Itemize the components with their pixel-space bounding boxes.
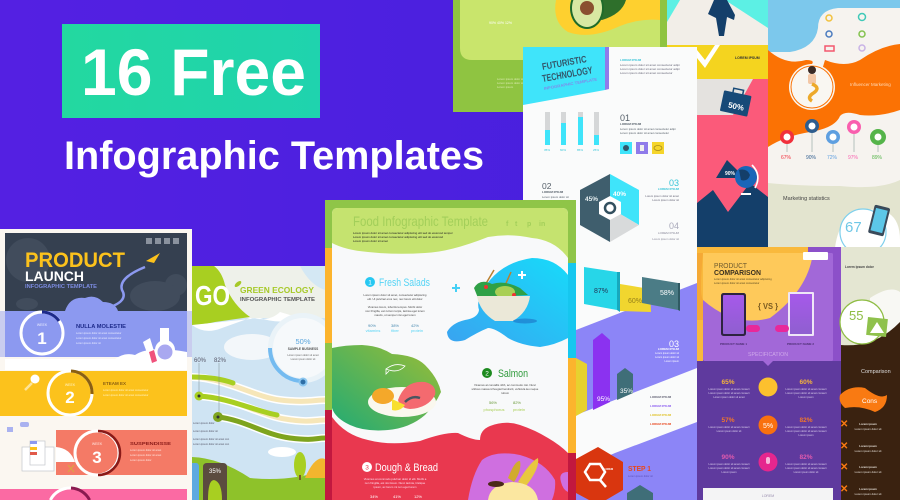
icon: phone: [868, 205, 890, 237]
text: comparison descriptions: Lorem ipsum dolor sit amet consect: [786, 391, 827, 395]
legend: column labels: LOREM IPSUM: [650, 395, 672, 399]
section: salmon: [472, 368, 539, 412]
section: salmon: 82%: [513, 400, 521, 405]
legend: column labels: LOREM IPSUM: [650, 413, 672, 417]
chart: hexagon: 40%: [613, 191, 626, 198]
icon: briefcase 50%: [720, 86, 752, 117]
section: fresh salads: non fringilla, est rutrum turpis, lacinia eget lorem: [365, 309, 425, 313]
text: section 02: 02: [542, 181, 552, 191]
panel: product comparison: [697, 247, 841, 500]
icons: social: t: [515, 221, 518, 228]
icons: x marks and rows: Lorem ipsum: [859, 422, 877, 426]
chart: 35% label: [203, 463, 227, 500]
text: band description: Lorem ipsum dolor sit amet con: [193, 442, 230, 446]
text: comparison descriptions: Lorem ipsum: [722, 470, 736, 474]
chart: comparison values: 82%: [799, 417, 813, 424]
icon: plus mark blue: [452, 284, 460, 292]
title badge: 16 Free: [81, 35, 306, 109]
panel: business template: [667, 0, 768, 248]
chart: isometric boxes: 58%: [660, 290, 674, 297]
section: salmon: rutrum: [501, 391, 510, 395]
icons: social squares: [146, 238, 179, 244]
text: section 03 on purple: Lorem ipsum dolor sit: [655, 352, 679, 355]
text: percent labels: [194, 358, 227, 364]
icon: briefcase 50%: 50%: [727, 101, 745, 113]
section: dough and bread: Dough & Bread: [375, 462, 438, 474]
chart: blue label: [192, 463, 199, 500]
text: section 01: Lorem ipsum dolor sit amet consectetur: [620, 131, 669, 135]
heading: launch: LAUNCH: [25, 268, 84, 284]
text: vs: { VS }: [758, 302, 778, 311]
text: intro: Lorem ipsum dolor sit amet consectetur adipiscing elit sed do eiusmod: [353, 235, 443, 239]
text: comparison descriptions: Lorem ipsum dolor sit amet consect: [786, 466, 827, 470]
text: intro: Lorem ipsum dolor sit amet: [353, 239, 388, 243]
markers: band dots: [194, 363, 223, 422]
chart: hexagon: [580, 174, 639, 242]
band: week 3: [56, 430, 187, 475]
text: avocado caption: Lorem ipsum: [497, 85, 514, 89]
icon: tree: [294, 452, 306, 480]
icon: documents illustration: [7, 422, 74, 472]
band: week 2: Lorem ipsum dolor sit amet consectetur: [103, 393, 149, 397]
text: product names: PRODUCT NAME 1: [720, 342, 747, 346]
icon: paper plane: [146, 253, 160, 263]
chart: 55% ring: [840, 300, 884, 344]
icon: flasks: [143, 328, 175, 364]
chart: 55% ring: 55: [849, 308, 863, 323]
icon: triangle 90%: [716, 160, 745, 178]
text: intro paragraph: Lorem ipsum dolor sit amet consectetur: [620, 71, 673, 75]
section: fresh salads: [364, 277, 430, 333]
band: week 2: WEEK: [65, 383, 76, 387]
section: fresh salads: Vivamus lorem, lobortis tempus. Morbi dolor: [368, 305, 422, 309]
section: dough and bread: [362, 462, 438, 499]
cloud: [65, 297, 118, 311]
band: week 3: Lorem ipsum dolor sit amet: [130, 448, 162, 452]
icon: bread: [488, 458, 538, 500]
icon: cons blob: Cons: [862, 398, 878, 405]
badge: mic: [758, 452, 778, 472]
section: salmon: Vivamus at convallis nibh, ac commodo nisi. Nunc: [474, 383, 537, 387]
blob: blue: [447, 258, 568, 347]
icon: cons blob: [840, 387, 887, 412]
text: step caption: Lorem ipsum dolor sit: [628, 474, 653, 478]
icons: x marks and rows: [840, 419, 882, 496]
chart: isometric boxes: 60%: [628, 298, 642, 305]
chart: comparison values: 82%: [799, 454, 813, 461]
chart: arrow columns: 95%: [597, 396, 610, 403]
band: week 4: [0, 488, 187, 500]
icon: leaf: [234, 280, 242, 288]
chart: isometric boxes: [584, 267, 680, 312]
section: salmon: ultrices massa id feugiat hendrerit, vehicula leo neque: [472, 387, 539, 391]
text: comparison descriptions: Lorem ipsum: [798, 433, 814, 437]
band: week 3: 3: [92, 448, 102, 467]
icons: x marks and rows: Lorem ipsum: [859, 487, 877, 491]
text: percent labels: 82%: [214, 358, 227, 364]
text: section 03: Lorem ipsum dolor sit amet: [645, 194, 679, 198]
text: comparison descriptions: Lorem ipsum dolor sit amet consect: [786, 429, 827, 433]
chart: comparison values: 57%: [721, 417, 735, 424]
section: dough and bread: 34%: [370, 494, 378, 499]
icons: x marks and rows: ✕: [840, 484, 848, 495]
heading: food infographic template: Food Infographic Template: [353, 213, 488, 229]
text: comparison descriptions: Lorem ipsum dolor sit amet consect: [786, 425, 827, 429]
panel: food infographic: [325, 200, 576, 500]
text: section 03: 03: [669, 178, 679, 188]
heading: futuristic technology: TECHNOLOGY: [541, 65, 594, 85]
heading: product comparison: Lorem ipsum dolor sit amet consectetur adipiscing: [714, 277, 772, 281]
text: avocado caption: [497, 77, 531, 89]
ground: [192, 457, 325, 500]
text: section 03 on purple: 03: [669, 339, 679, 349]
icon: picture tile: [866, 317, 888, 337]
chart: wavy bands: [192, 377, 325, 439]
text: comparison descriptions: Lorem ipsum dolor sit amet consect: [786, 462, 827, 466]
band: week 3: SUSPENDISSE: [130, 441, 171, 446]
section: fresh salads: Fresh Salads: [379, 277, 430, 289]
pill buttons: [746, 325, 789, 332]
icons: x marks and rows: ✕: [840, 462, 848, 473]
section: fresh salads: 1: [368, 280, 372, 286]
band: week 2: Lorem ipsum dolor sit amet consectetur: [103, 388, 149, 392]
chart: comparison values: [721, 379, 813, 461]
icon: plus marks: [518, 271, 526, 279]
text: intro: [353, 231, 453, 243]
text: infographic template: INFOGRAPHIC TEMPLATE: [240, 297, 315, 303]
icon: salmon plate: [368, 382, 436, 417]
chart: vertical bars: [544, 112, 599, 152]
section: fresh salads: 90%: [368, 323, 376, 328]
icons: x marks and rows: Lorem ipsum dolor sit: [855, 449, 882, 453]
text: intro: Lorem ipsum dolor sit amet consectetur adipiscing elit sed do eiusmod tempor: [353, 231, 453, 235]
icon: salad bowl: [474, 270, 537, 324]
icons: x marks and rows: Lorem ipsum: [859, 444, 877, 448]
pointer notch: [763, 361, 773, 366]
chart: circular gauge 50%: SAMPLE BUSINESS: [288, 347, 318, 351]
icon: red magnifier hexagon: LOREM: [604, 468, 613, 471]
text: section 04: Lorem ipsum dolor sit: [652, 237, 679, 241]
text: section 02: LOREM IPSUM: [542, 190, 564, 194]
text: avocado caption: Lorem ipsum dolor sit amet: [497, 77, 531, 81]
blob: red: [332, 417, 568, 500]
section: dough and bread: non fringilla, est nisi lorem. Nunc lacinia, tristique: [365, 481, 426, 485]
text: comparison descriptions: Lorem ipsum dolor sit amet consect: [709, 391, 750, 395]
icon: businessman: [708, 0, 735, 36]
chart: comparison values: 65%: [721, 379, 735, 386]
band: week 2: 2: [65, 388, 75, 407]
text: section 03 on purple: [655, 339, 679, 363]
icon: teal hexagon partial: [627, 485, 653, 500]
text: section 02: Lorem ipsum dolor sit: [542, 195, 569, 199]
text: product names: PRODUCT NAME 2: [787, 342, 814, 346]
text: comparison descriptions: Lorem ipsum dolor sit amet consect: [709, 462, 750, 466]
band: week 3: Lorem ipsum dolor sit amet: [130, 453, 162, 457]
text: product names: [720, 342, 814, 346]
section: dough and bread: ipsum, ac lorem mi non eget lorem: [374, 485, 417, 489]
section: fresh salads: Lorem ipsum dolor sit amet, consectetur adipiscing: [364, 293, 427, 297]
text: top caption: Lorem ipsum dolor: [845, 265, 875, 269]
text: avocado caption: Lorem ipsum dolor sit: [497, 81, 524, 85]
text: comparison descriptions: Lorem ipsum dolor sit amet consect: [709, 387, 750, 391]
section: fresh salads: fiber: [391, 328, 400, 333]
chart: social pins: 89%: [872, 155, 883, 161]
chart: circular gauge 50%: Lorem ipsum dolor sit amet: [287, 353, 319, 357]
text: section 01: LOREM IPSUM: [620, 122, 642, 126]
text: marketing statistics: Marketing statistics: [783, 196, 830, 202]
text: section 03: LOREM IPSUM: [658, 187, 679, 191]
chart: vertical bars: 60%: [560, 148, 566, 152]
icons: social: p: [527, 221, 531, 228]
band: week 1: Lorem ipsum dolor sit amet consectetur: [76, 336, 122, 340]
legend: column labels: [650, 395, 672, 426]
heading: green ecology: GREEN ECOLOGY: [240, 285, 314, 295]
section: dough and bread: 41%: [393, 494, 401, 499]
chart: circular gauge 50%: 50%: [295, 337, 311, 346]
text: percent labels: 60%: [194, 358, 207, 364]
heading: futuristic technology: INFOGRAPHIC TEMPLATE: [543, 77, 598, 91]
icons: x marks and rows: Lorem ipsum: [859, 465, 877, 469]
section: dough and bread: 3: [365, 464, 369, 472]
heading: product comparison: [714, 263, 772, 285]
chart: comparison values: 60%: [799, 379, 813, 386]
section: salmon: Salmon: [498, 368, 528, 380]
legend card: LOREM: [762, 494, 774, 498]
chart: isometric boxes: 87%: [594, 288, 608, 295]
text: comparison descriptions: Lorem ipsum dolor sit amet consect: [786, 387, 827, 391]
band: week 1: WEEK: [37, 323, 48, 327]
diagonal purple bands: [576, 283, 697, 415]
band: week 1: [0, 311, 192, 370]
chart: 67% ring: [835, 209, 900, 255]
heading: step 1: STEP 1: [628, 464, 651, 473]
heading: product comparison: COMPARISON: [714, 270, 761, 277]
section: salmon: phosphorus: [484, 407, 504, 412]
section: fresh salads: mauris, ut semper nisi eget lorem: [374, 313, 416, 317]
section: salmon: protein: [513, 407, 525, 412]
section: dough and bread: Vivamus at commodo pulvinar dolor id elit. Morbi a: [364, 477, 427, 481]
chart: vertical bars: 25%: [593, 148, 599, 152]
text: comparison descriptions: Lorem ipsum dolor sit: [717, 429, 742, 433]
text: comparison descriptions: Lorem ipsum dolor sit amet consect: [709, 466, 750, 470]
icon: cloud small: [268, 447, 296, 457]
text: band description: Lorem ipsum dolor: [193, 421, 215, 425]
text: intro paragraph: Lorem ipsum dolor sit amet consectetur adipi: [620, 67, 680, 71]
chart: arrow columns: [576, 333, 633, 416]
section: salmon: 56%: [489, 400, 497, 405]
band: week 1: NULLA MOLESTIE: [76, 324, 127, 330]
chart: hexagon: 45%: [585, 196, 598, 203]
chart: circular gauge 50%: Lorem ipsum dolor sit: [291, 357, 316, 361]
chart: vertical bars: 35%: [544, 148, 550, 152]
section: fresh salads: vitamins: [366, 328, 380, 333]
text: section 01: 01: [620, 113, 630, 123]
heading: futuristic technology: [539, 53, 598, 91]
band: week 1: 1: [37, 329, 47, 348]
icons: x marks and rows: Lorem ipsum dolor sit: [855, 427, 882, 431]
text: avocado stats: 90% 40% 12%: [489, 21, 512, 25]
badge: search: [758, 378, 778, 396]
badge: percent: [758, 416, 778, 434]
text: comparison descriptions: Lorem ipsum dolor sit: [794, 470, 819, 474]
heading: product comparison: PRODUCT: [714, 263, 748, 270]
path: winding road: [100, 267, 145, 310]
text: band description: Lorem ipsum dolor sit: [193, 429, 218, 433]
panel: marketing template: [768, 0, 900, 255]
panel: futuristic technology: [523, 47, 697, 500]
chart: 67% ring: 67: [845, 219, 862, 236]
text: intro paragraph: Lorem ipsum dolor sit amet consectetur adipi: [620, 63, 680, 67]
text: intro paragraph: [620, 58, 680, 75]
text: section 03: Lorem ipsum dolor sit: [652, 198, 679, 202]
chart: vertical bars: 85%: [577, 148, 583, 152]
band: week 2: ETEAM EX: [103, 381, 126, 386]
section: fresh salads: elit. Ut pulvinar eros nec, nec lorem elit dolor: [367, 297, 423, 301]
text: comparison descriptions: [709, 387, 827, 474]
icon: yoga figure: [808, 66, 817, 101]
text: comparison descriptions: Lorem ipsum: [798, 395, 814, 399]
icons: x marks and rows: Lorem ipsum dolor sit: [855, 470, 882, 474]
heading: product: PRODUCT: [25, 249, 125, 272]
text: band description: Lorem ipsum dolor sit amet con: [193, 437, 230, 441]
subtitle: Infographic Templates: [64, 134, 484, 178]
icon: fish outline: [386, 365, 405, 374]
text: section 03 on purple: LOREM IPSUM: [658, 347, 679, 351]
section: salmon: 2: [485, 370, 489, 378]
band: week 2: [0, 371, 187, 416]
text: specification: SPECIFICATION: [748, 352, 788, 358]
panel: product launch: [0, 229, 192, 500]
band: week 3: Lorem ipsum dolor: [130, 458, 152, 462]
blob: green: [332, 345, 441, 430]
legend card: [703, 488, 833, 500]
panel: comparison pros and cons: [840, 247, 900, 500]
text: section 03 on purple: Lorem ipsum dolor sit: [655, 356, 679, 359]
text: section 02: [542, 181, 569, 199]
legend: column labels: LOREM IPSUM: [650, 404, 672, 408]
chart: comparison values: 90%: [721, 454, 735, 461]
chart: social pins: [780, 119, 886, 161]
band: week 3: WEEK: [92, 442, 103, 446]
icons: tile row: [620, 142, 664, 154]
text: band description: [193, 421, 230, 446]
chart: social pins: 72%: [827, 155, 838, 161]
chart: social pins: 67%: [781, 155, 792, 161]
icon: red magnifier hexagon: [576, 447, 623, 500]
blob: purple: [468, 453, 555, 500]
chart: social pins: 90%: [806, 155, 817, 161]
icon: globe: [735, 165, 758, 195]
text: section 03: [645, 178, 679, 202]
text: section 04: [652, 221, 679, 241]
section: dough and bread: 12%: [414, 494, 422, 499]
icons: x marks and rows: ✕: [840, 419, 848, 430]
icon: tablet: [788, 292, 814, 336]
icons: social: [506, 221, 545, 228]
text: infographic template: INFOGRAPHIC TEMPLATE: [25, 284, 97, 290]
text: section 03 on purple: Lorem ipsum: [665, 360, 679, 363]
text: section 04: 04: [669, 221, 679, 231]
text: influencer heading: Influencer Marketing: [850, 82, 891, 87]
heading: go: GO: [195, 280, 230, 311]
chart: social pins: 97%: [848, 155, 859, 161]
icon: triangle 90%: 90%: [725, 171, 736, 177]
icon group: top list: [825, 14, 866, 51]
text: business labels: LOREM IPSUM: [735, 56, 760, 60]
panel: avocado template: [453, 0, 667, 112]
band: week 1: Lorem ipsum dolor sit amet consectetur: [76, 331, 122, 335]
band: week 1: Lorem ipsum dolor sit: [76, 341, 101, 345]
chart: 35% label: 35%: [209, 469, 222, 475]
icons: x marks and rows: ✕: [840, 441, 848, 452]
heading: product comparison: Lorem ipsum dolor sit amet consectetur: [714, 281, 760, 285]
icon: cloud: [224, 334, 280, 360]
icon: avocado: [570, 0, 626, 29]
legend: column labels: LOREM IPSUM: [650, 422, 672, 426]
text: comparison descriptions: Lorem ipsum dolor sit amet consect: [709, 425, 750, 429]
icons: x marks and rows: Lorem ipsum dolor sit: [855, 492, 882, 496]
chart: circular gauge 50%: [268, 313, 338, 386]
section: fresh salads: 38%: [391, 323, 399, 328]
icons: social: in: [539, 221, 545, 228]
heading: futuristic technology: FUTURISTIC: [541, 54, 588, 73]
heading: comparison: Comparison: [861, 369, 891, 375]
text: section 01: [620, 113, 676, 135]
section: fresh salads: protein: [411, 328, 423, 333]
badge: percent: 5%: [763, 423, 773, 430]
chart: arrow columns: 35%: [620, 388, 633, 395]
icon: phone: [721, 293, 746, 336]
text: section 04: LOREM IPSUM: [658, 231, 679, 235]
text: comparison descriptions: Lorem ipsum dolor sit amet: [713, 395, 745, 399]
panel: green ecology: [192, 266, 338, 500]
text: section 01: Lorem ipsum dolor sit amet consectetur adipi: [620, 127, 676, 131]
icons: social: f: [506, 221, 509, 228]
section: fresh salads: 42%: [411, 323, 419, 328]
text: intro paragraph: LOREM IPSUM: [620, 58, 642, 62]
